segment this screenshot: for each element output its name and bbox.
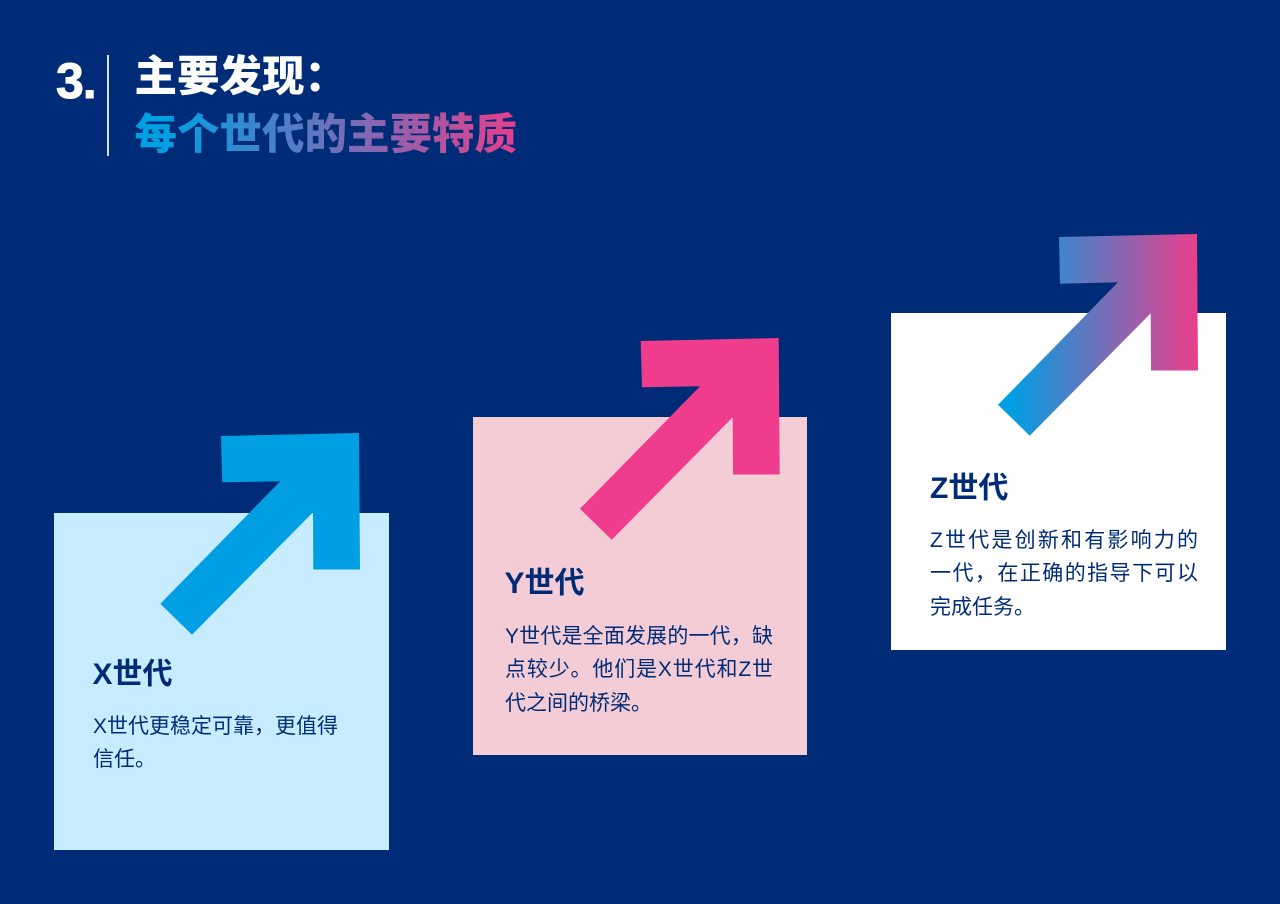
Y body text (505, 624, 773, 715)
Y body text: 代之间的桥梁。 (505, 692, 652, 715)
Z body text: 完成任务。 (930, 596, 1035, 619)
Y body text: 点较少。他们是X世代和Z世 (505, 658, 773, 681)
icon: X arrow (160, 433, 360, 635)
title: line 1: 主要发现： (134, 54, 347, 101)
panel: Z generation (891, 313, 1226, 650)
title: line 2 gradient: 每个世代的主要特质 (134, 112, 517, 159)
X heading: X世代 (92, 658, 173, 691)
panel: X generation (54, 513, 389, 850)
Y heading: Y世代 (504, 567, 585, 600)
Z body text: 一代，在正确的指导下可以 (930, 562, 1198, 585)
section number: 3. (56, 53, 96, 109)
Z body text: Z世代是创新和有影响力的 (930, 529, 1198, 552)
icon: Y arrow (580, 338, 780, 540)
Y body text: Y世代是全面发展的一代，缺 (505, 625, 773, 648)
icon: Z arrow (998, 234, 1198, 436)
panel: Y generation (473, 417, 807, 754)
Z heading: Z世代 (930, 472, 1008, 505)
Z body text (930, 529, 1198, 619)
header divider (107, 55, 109, 156)
X body text (93, 715, 338, 771)
X body text: X世代更稳定可靠，更值得 (93, 715, 338, 738)
X body text: 信任。 (93, 748, 156, 771)
